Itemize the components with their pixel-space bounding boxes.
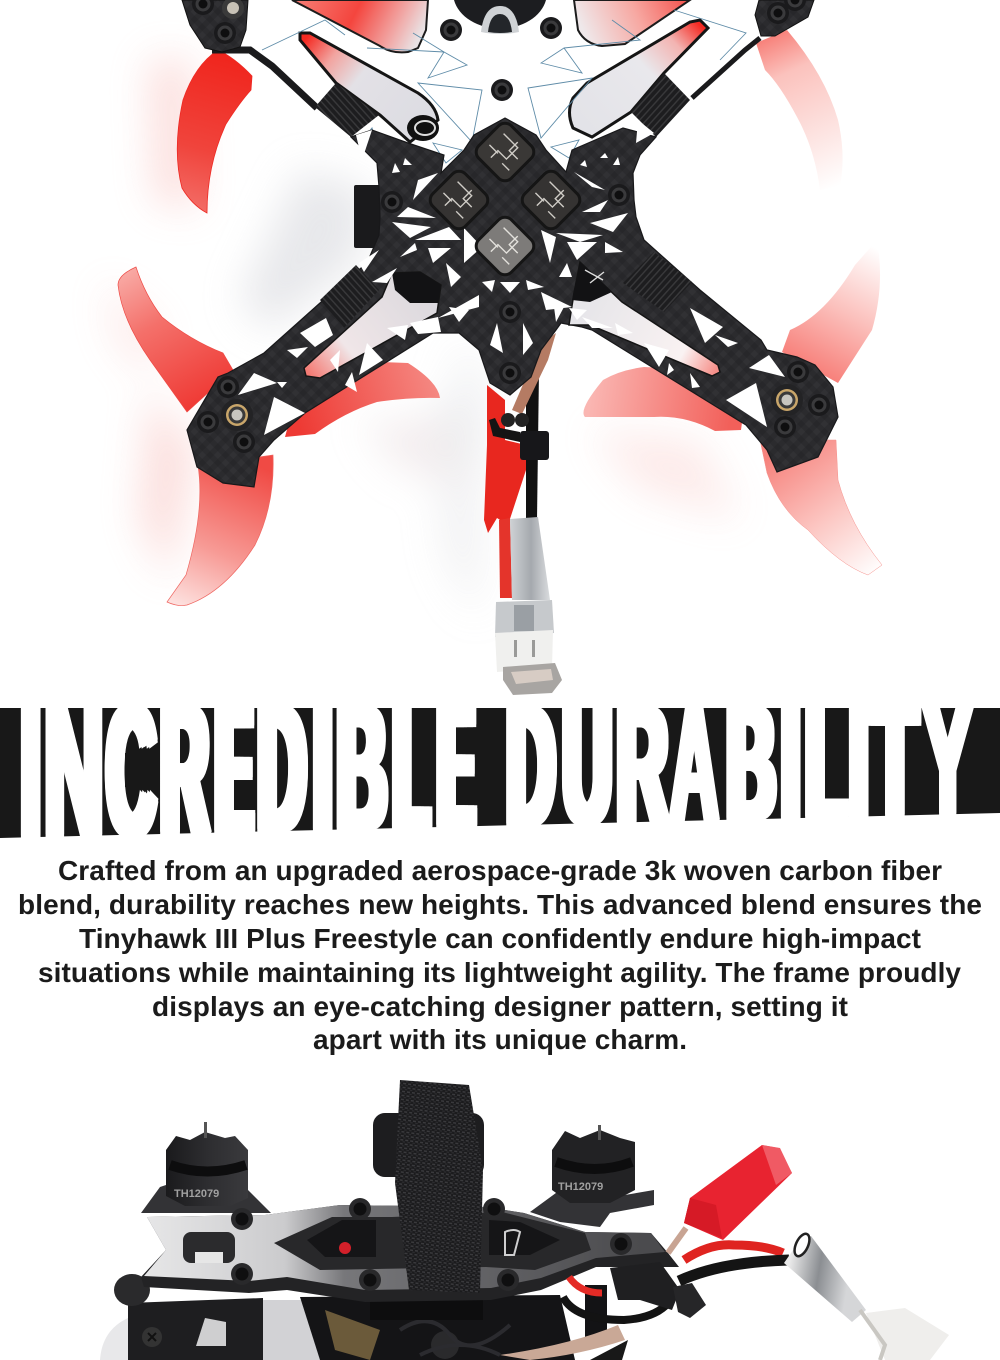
hole: centre left [307, 1220, 376, 1257]
headline: INCREDIBLE DURABILITY: R [617, 671, 667, 859]
plate screws [231, 1208, 253, 1230]
slot: right lower arm [569, 262, 720, 376]
rubber strap: upper right [631, 73, 690, 137]
wires: right slot [572, 262, 612, 302]
velcro tab [354, 185, 382, 248]
chip [370, 1298, 483, 1320]
carbon fibre frame with white triangle pattern [182, 0, 838, 487]
headline: INCREDIBLE DURABILITY: I [313, 669, 332, 869]
headline: INCREDIBLE DURABILITY: E [439, 670, 473, 865]
blade: upper-right prop [756, 30, 843, 190]
body paragraph [18, 855, 982, 1055]
frame: carbon body and arms [187, 118, 838, 487]
red lead wire [499, 518, 512, 598]
motor label: TH12079 [558, 1181, 603, 1193]
hole: left [183, 1232, 235, 1263]
motor label: TH12079 [174, 1188, 219, 1200]
left standoff [128, 1298, 263, 1360]
window: top-left notch [292, 0, 428, 52]
headline: INCREDIBLE DURABILITY: I [21, 667, 41, 878]
headline: INCREDIBLE DURABILITY: R [161, 668, 208, 874]
electronics tangle [300, 1295, 575, 1360]
blade: lower-right prop, left [583, 367, 745, 431]
window: left slot [300, 33, 438, 142]
photo: drone front view [100, 1080, 949, 1360]
flight controller windows [426, 119, 584, 279]
headline: INCREDIBLE DURABILITY: N [44, 667, 104, 877]
connector plug [503, 663, 562, 695]
red braid sleeve [484, 385, 526, 533]
hub: lower left [197, 376, 255, 453]
white triangles [238, 120, 785, 435]
blade: upper-left prop [177, 50, 252, 213]
body paragraph: Crafted from an upgraded aerospace-grade 3k woven carbon fiber [58, 855, 942, 886]
headline: INCREDIBLE DURABILITY: D [258, 669, 306, 870]
upper arm outlines [212, 50, 317, 108]
blade: lower-left prop, lower [167, 455, 273, 606]
headline: INCREDIBLE DURABILITY: U [563, 671, 611, 860]
blade: lower-left prop, right [285, 360, 440, 437]
grey base edge [100, 1318, 128, 1360]
wires: left slot [392, 272, 441, 303]
frame upper windows [292, 0, 708, 142]
diamond window: right [518, 167, 584, 233]
hub: lower right [771, 361, 830, 438]
lower frame and electronics [100, 1274, 628, 1360]
slot: left lower arm [304, 272, 441, 378]
blue designer line pattern [262, 10, 746, 163]
screws near tie [501, 413, 515, 427]
velcro strap [395, 1080, 483, 1293]
white connector body [495, 630, 553, 672]
blade: lower-left prop, upper [118, 267, 233, 412]
headline: INCREDIBLE DURABILITY: Y [924, 674, 971, 849]
photo: top drone frame on white wall [110, 0, 882, 695]
right motor [530, 1125, 654, 1227]
headline: INCREDIBLE DURABILITY: T [872, 674, 918, 850]
diamond window: top [472, 119, 538, 185]
headline: INCREDIBLE DURABILITY: B [727, 672, 775, 855]
body paragraph: apart with its unique charm. [313, 1024, 687, 1055]
motor seen through left slot [407, 115, 439, 141]
blade: lower-right prop, lower [760, 440, 882, 575]
copper braided wire [512, 333, 556, 414]
window: right slot [570, 20, 708, 137]
body paragraph: blend, durability reaches new heights. This advanced blend ensures the [18, 889, 982, 920]
hub: upper right [755, 0, 814, 36]
headline: INCREDIBLE DURABILITY: B [337, 669, 387, 868]
propeller blades [118, 30, 882, 606]
silver shrink tube and plug [784, 1232, 949, 1360]
body paragraph: displays an eye-catching designer pattern, setting it [152, 991, 848, 1022]
plate edge [141, 1205, 679, 1302]
headline band [0, 708, 1000, 838]
headline: INCREDIBLE DURABILITY: I [849, 673, 869, 852]
blade: lower-right prop, upper right [782, 240, 880, 383]
right standoff [585, 1285, 607, 1345]
battery lead and connector [354, 185, 562, 695]
red JST connector cap [684, 1145, 792, 1240]
battery lead wires [563, 1228, 789, 1320]
screws [381, 17, 630, 384]
diamond window: bottom [472, 213, 538, 279]
connector clamp [495, 600, 554, 637]
standoff cut-out [196, 1318, 226, 1346]
camera lens opening [454, 0, 546, 29]
headline: INCREDIBLE DURABILITY: E [217, 668, 251, 872]
silver shrink wrap [510, 517, 550, 600]
body paragraph: Tinyhawk III Plus Freestyle can confidently endure high-impact [79, 923, 921, 954]
frame clip and zip tie [610, 1262, 706, 1318]
left motor [141, 1122, 271, 1213]
carbon top plate [141, 1198, 679, 1302]
white plug [866, 1308, 949, 1360]
zip tie [489, 418, 520, 442]
camera mount behind strap [373, 1113, 484, 1177]
headline: INCREDIBLE DURABILITY: L [394, 670, 429, 866]
diamond window: left [426, 167, 492, 233]
plate: dark raised centre [274, 1212, 591, 1270]
body paragraph: situations while maintaining its lightweight agility. The frame proudly [38, 957, 961, 988]
rubber strap: lower right [623, 252, 692, 312]
black wire [526, 370, 539, 520]
headline: INCREDIBLE DURABILITY: A [670, 672, 719, 857]
headline: INCREDIBLE DURABILITY: L [806, 673, 846, 852]
plate: silver top surface [144, 1205, 665, 1290]
headline: INCREDIBLE DURABILITY: C [107, 667, 155, 875]
wall shadows [105, 60, 740, 620]
hub: upper left [182, 0, 248, 52]
rubber strap: lower left [320, 265, 379, 328]
headline: INCREDIBLE DURABILITY: D [507, 671, 555, 862]
standoff screw [142, 1327, 162, 1347]
window: top-right notch [574, 0, 690, 46]
headline: INCREDIBLE DURABILITY: I [781, 673, 801, 854]
rubber strap: upper left [315, 83, 379, 137]
hole: centre right [489, 1220, 560, 1255]
